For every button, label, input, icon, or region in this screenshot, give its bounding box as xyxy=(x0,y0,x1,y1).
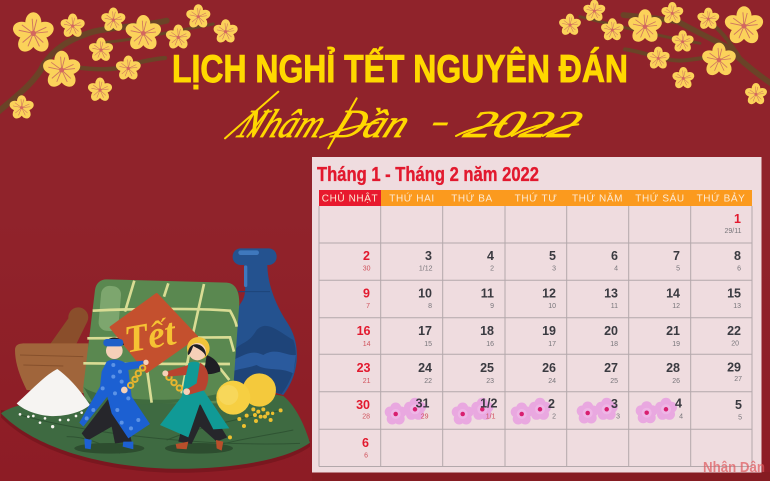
week 5: 28 xyxy=(666,361,680,375)
week 4: 18 xyxy=(610,341,618,348)
week 3: 12 xyxy=(542,286,556,300)
week 2: 2 xyxy=(490,266,494,272)
rice pile xyxy=(17,369,90,428)
week 3: 15 xyxy=(727,286,741,300)
week 5: 23 xyxy=(486,378,494,385)
week 3: 11 xyxy=(611,303,618,310)
week 2: 4 xyxy=(487,249,494,263)
holiday blossoms xyxy=(385,398,677,424)
week 1: 1 xyxy=(734,212,741,226)
week 5: 22 xyxy=(424,378,432,385)
week 6: 2 xyxy=(548,397,555,411)
week 2: 3 xyxy=(425,249,432,263)
week 2: 2 xyxy=(363,249,370,263)
week 6 xyxy=(356,396,742,422)
week 3: 9 xyxy=(363,286,370,300)
week 3: 7 xyxy=(366,303,370,310)
week 6: 5 xyxy=(735,398,742,412)
week 5: 25 xyxy=(610,378,618,385)
week 6: 29 xyxy=(421,414,429,420)
week 4 xyxy=(357,324,741,348)
week 4: 18 xyxy=(480,324,494,338)
week 4: 22 xyxy=(727,324,741,338)
weekday header: THỨ HAI xyxy=(389,192,435,204)
girl figure xyxy=(160,337,233,454)
leaf platter xyxy=(1,393,310,473)
week 7 xyxy=(362,436,369,460)
calendar grid xyxy=(319,206,752,466)
title: LỊCH NGHỈ TẾT NGUYÊN ĐÁN xyxy=(172,47,628,91)
weekday header: THỨ TƯ xyxy=(515,192,557,204)
week 5: 23 xyxy=(357,361,371,375)
week 4: 15 xyxy=(424,341,432,348)
week 6: 30 xyxy=(356,398,370,412)
subtitle: - xyxy=(426,104,457,138)
week 2: 3 xyxy=(552,266,556,272)
week 6: 28 xyxy=(362,414,370,420)
weekday header: THỨ BẢY xyxy=(697,192,745,204)
week 3 xyxy=(363,286,741,310)
vase xyxy=(229,248,297,395)
week 3: 13 xyxy=(604,286,618,300)
week 2: 1/12 xyxy=(419,266,433,272)
week 4: 20 xyxy=(731,340,739,348)
weekday header: CHỦ NHẬT xyxy=(322,192,378,204)
mortar and pestle xyxy=(15,307,88,393)
subtitle: Dần xyxy=(325,103,417,147)
week 7: 6 xyxy=(362,436,369,450)
week 2: 5 xyxy=(549,249,556,263)
calendar heading: Tháng 1 - Tháng 2 năm 2022 xyxy=(317,164,539,186)
week 3: 10 xyxy=(418,286,432,300)
coin strings xyxy=(128,365,182,391)
week 2: 30 xyxy=(363,266,371,272)
week 5: 27 xyxy=(734,376,742,383)
week 4: 21 xyxy=(666,324,680,338)
week 6: 2 xyxy=(552,414,556,420)
week 2: 7 xyxy=(673,249,680,263)
week 1: 29/11 xyxy=(724,228,742,235)
week 1 xyxy=(724,212,742,235)
week 6: 4 xyxy=(675,396,682,410)
subtitle xyxy=(225,92,589,148)
week 2: 4 xyxy=(614,266,618,272)
week 6: 4 xyxy=(679,414,683,420)
week 5: 21 xyxy=(363,378,371,385)
week 4: 20 xyxy=(604,324,618,338)
week 4: 16 xyxy=(486,341,494,348)
week 4: 17 xyxy=(418,324,432,338)
week 3: 11 xyxy=(481,286,494,300)
week 3: 9 xyxy=(490,303,494,310)
week 3: 8 xyxy=(428,303,432,310)
week 2: 5 xyxy=(676,266,680,272)
week 7: 6 xyxy=(364,452,368,460)
week 5: 27 xyxy=(604,361,618,375)
boy figure xyxy=(74,337,150,454)
week 6: 3 xyxy=(616,414,620,420)
week 4: 16 xyxy=(357,324,371,338)
illustration: Tet still life xyxy=(1,248,310,473)
week 6: 31 xyxy=(416,396,430,410)
week 5: 25 xyxy=(480,361,494,375)
subtitle: Nhâm xyxy=(231,103,333,147)
weekday header: THỨ NĂM xyxy=(572,192,623,204)
subtitle: 2022 xyxy=(458,104,589,146)
week 5: 24 xyxy=(548,378,556,385)
week 3: 14 xyxy=(666,286,680,300)
banner: Tet: Tết xyxy=(121,311,180,361)
weekday header xyxy=(319,190,752,206)
week 4: 19 xyxy=(672,341,680,348)
week 6: 1/1 xyxy=(486,414,496,420)
week 4: 17 xyxy=(548,341,556,348)
mung beans xyxy=(228,407,283,439)
week 4: 19 xyxy=(542,324,556,338)
sticky rice cake xyxy=(83,279,239,407)
panel: calendar xyxy=(312,157,762,472)
week 5 xyxy=(357,360,742,385)
week 5: 26 xyxy=(672,378,680,385)
week 5: 26 xyxy=(542,361,556,375)
week 3: 10 xyxy=(548,303,556,310)
week 2 xyxy=(363,249,741,272)
apricot blossom branch: top left xyxy=(0,4,239,121)
weekday header: THỨ SÁU xyxy=(635,192,685,204)
week 3: 12 xyxy=(672,303,680,310)
week 2: 6 xyxy=(737,266,741,272)
golden cakes xyxy=(216,373,276,415)
week 2: 8 xyxy=(734,249,741,263)
week 6: 1/2 xyxy=(480,396,498,410)
week 5: 29 xyxy=(727,360,741,374)
week 3: 13 xyxy=(733,303,741,310)
banner: Tet xyxy=(111,294,197,372)
week 4: 14 xyxy=(363,341,371,348)
weekday header: THỨ BA xyxy=(451,192,493,204)
week 6: 3 xyxy=(611,397,618,411)
bottom darker band xyxy=(312,472,770,481)
apricot blossom branch: top right xyxy=(558,0,770,106)
week 6: 5 xyxy=(738,414,742,422)
week 5: 24 xyxy=(418,361,432,375)
week 2: 6 xyxy=(611,249,618,263)
